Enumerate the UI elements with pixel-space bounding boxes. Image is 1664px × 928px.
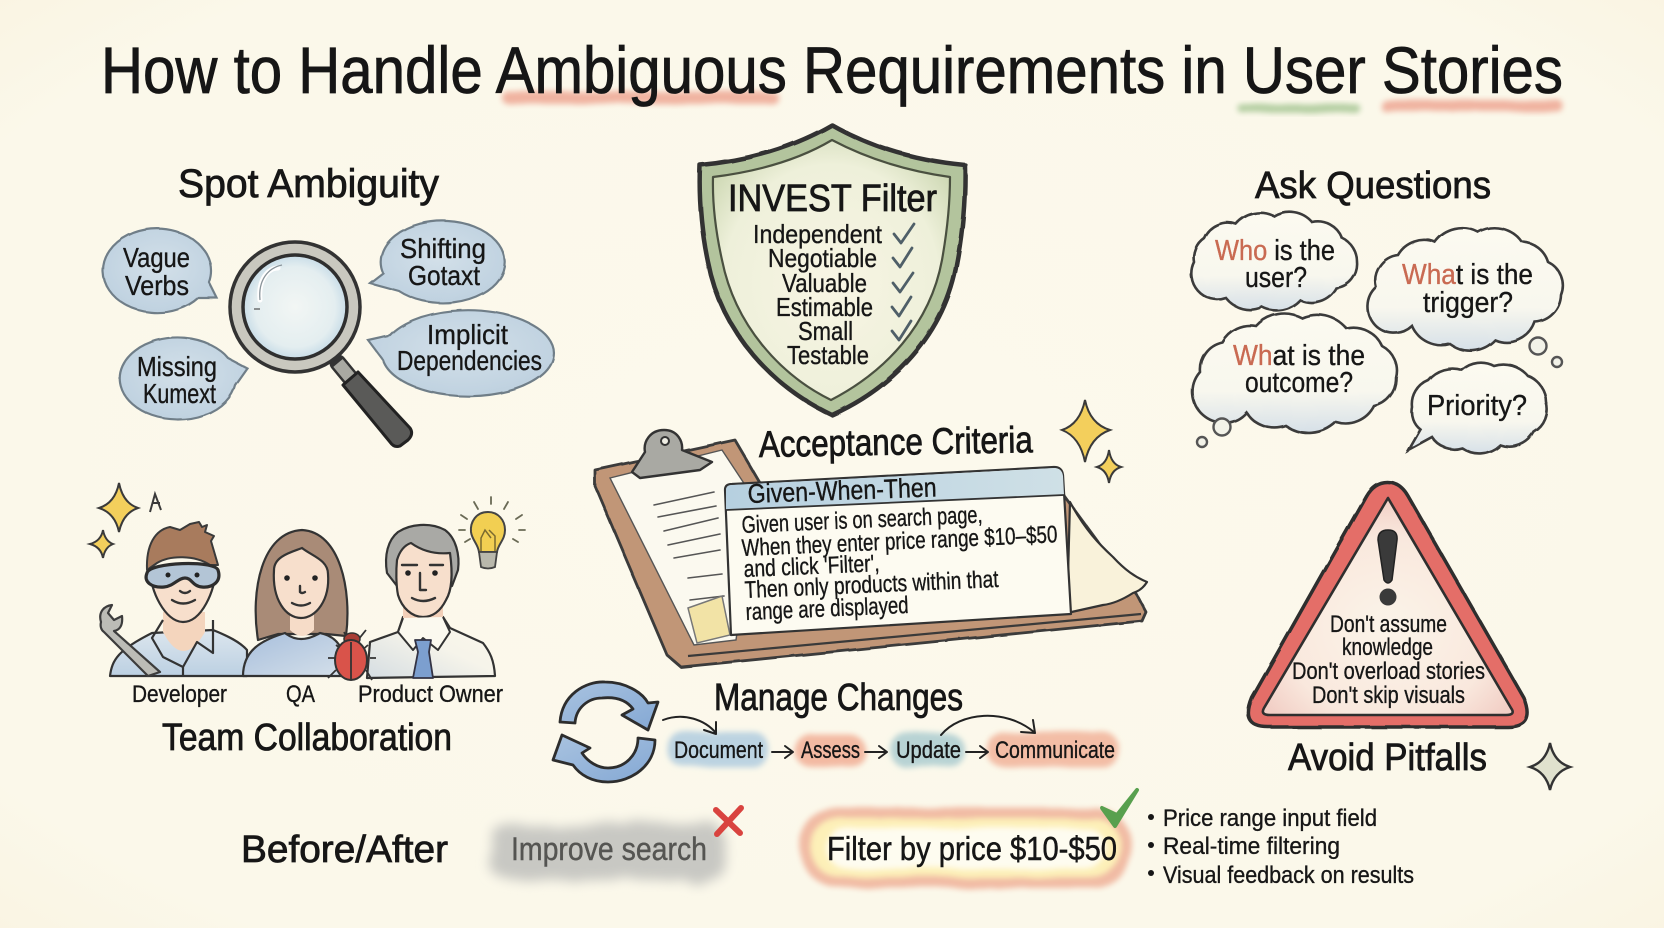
cloud: who is the user xyxy=(1191,212,1357,310)
speech bubble: missing context: Kumext xyxy=(143,378,216,409)
speech bubble: implicit dependencies: Implicit xyxy=(427,319,508,350)
heading: ask questions: Ask Questions xyxy=(1255,165,1491,207)
heading: manage changes: Manage Changes xyxy=(714,677,963,719)
icon: check marks xyxy=(892,224,914,340)
cloud: priority xyxy=(1408,363,1547,453)
sticky note xyxy=(688,596,730,643)
scenario text: When they enter price range $10–$50 xyxy=(741,521,1058,562)
speech bubble: missing context xyxy=(120,337,247,419)
scenario text: Given user is on search page, xyxy=(741,502,983,539)
labels: Developer xyxy=(132,681,227,708)
process flow xyxy=(663,716,1119,767)
bullet list: Visual feedback on results xyxy=(1163,862,1414,889)
person: developer xyxy=(100,522,247,677)
icon: green check xyxy=(1102,790,1137,826)
invest list: Valuable xyxy=(782,268,867,298)
after: filter by price xyxy=(805,813,1127,882)
card: given when then: Given-When-Then xyxy=(747,472,937,509)
clip xyxy=(632,430,712,478)
invest list xyxy=(753,219,883,370)
icon: cycle arrows xyxy=(553,682,658,782)
cloud: what is the trigger: trigger? xyxy=(1423,287,1513,319)
cloud: priority: Priority? xyxy=(1427,390,1527,422)
bullet list xyxy=(1148,805,1414,889)
panel: ask questions xyxy=(1191,165,1563,453)
after: filter by price: Filter by price $10-$50 xyxy=(827,830,1117,867)
invest list: Small xyxy=(798,316,853,346)
icon: bug xyxy=(328,630,376,680)
pitfall list: Don't assume xyxy=(1330,611,1447,638)
icon: wrench xyxy=(100,605,160,676)
cloud: who is the user: Who is the xyxy=(1215,235,1335,267)
step: communicate: Communicate xyxy=(995,737,1115,764)
step: communicate xyxy=(987,732,1119,767)
panel: acceptance criteria xyxy=(595,400,1147,667)
card: given when then xyxy=(725,467,1071,635)
scenario text: and click 'Filter', xyxy=(743,550,880,583)
speech bubble: implicit dependencies xyxy=(368,310,554,396)
invest list: Testable xyxy=(787,340,869,370)
step: document: Document xyxy=(674,737,763,764)
labels xyxy=(132,681,503,708)
speech bubble: vague verbs: Vague xyxy=(123,242,190,273)
speech bubble: shifting gotaxt: Gotaxt xyxy=(408,260,480,291)
heading: spot ambiguity: Spot Ambiguity xyxy=(178,162,439,206)
cloud: who is the user: user? xyxy=(1245,262,1307,294)
cloud: what is the outcome: What is the xyxy=(1233,340,1365,372)
underline: Ambiguous xyxy=(502,91,778,104)
step: update: Update xyxy=(896,737,961,764)
pitfall list: Don't overload stories xyxy=(1292,658,1485,685)
clipboard xyxy=(595,430,1147,667)
panel: avoid pitfalls xyxy=(1248,482,1570,790)
icon: magnifying glass xyxy=(230,242,412,446)
arrows between steps xyxy=(663,716,1035,758)
invest list: Negotiable xyxy=(768,243,877,273)
underline: Stories xyxy=(1381,100,1563,112)
before: improve search: Improve search xyxy=(511,831,707,867)
speech bubble: vague verbs: Verbs xyxy=(125,270,189,301)
scenario text: range are displayed xyxy=(745,592,909,626)
person: qa xyxy=(243,530,348,676)
speech bubble: shifting gotaxt: Shifting xyxy=(400,233,486,264)
labels: Product Owner xyxy=(358,681,503,708)
before: improve search xyxy=(490,824,726,880)
icon: sparkles xyxy=(90,483,161,558)
cloud: what is the outcome: outcome? xyxy=(1245,367,1353,399)
cloud: what is the trigger xyxy=(1367,228,1563,351)
step: assess: Assess xyxy=(801,737,860,764)
speech bubble: missing context: Missing xyxy=(137,351,217,382)
step: document xyxy=(667,732,769,766)
speech bubble: shifting gotaxt xyxy=(370,221,505,303)
panel: before and after xyxy=(241,790,1414,889)
labels: QA xyxy=(286,681,315,708)
bullet list: Price range input field xyxy=(1163,805,1377,832)
cloud: what is the trigger: What is the xyxy=(1402,259,1533,291)
icon: sparkle xyxy=(1530,743,1570,790)
panel: team collaboration xyxy=(90,483,525,759)
heading: acceptance criteria: Acceptance Criteria xyxy=(758,419,1033,465)
scenario text: Then only products within that xyxy=(744,566,999,604)
bullet list: Real-time filtering xyxy=(1163,833,1340,860)
heading: avoid pitfalls: Avoid Pitfalls xyxy=(1288,737,1487,779)
speech bubble: vague verbs xyxy=(103,229,217,313)
heading: team collaboration: Team Collaboration xyxy=(162,717,452,759)
step: update xyxy=(890,734,965,767)
panel: spot ambiguity xyxy=(103,162,554,446)
step: assess xyxy=(795,734,865,767)
underline: User xyxy=(1238,104,1360,113)
scenario text xyxy=(741,502,1058,626)
pitfall list: knowledge xyxy=(1342,634,1433,661)
shield shape xyxy=(700,125,965,415)
heading: invest filter: INVEST Filter xyxy=(728,178,937,220)
pitfall list: Don't skip visuals xyxy=(1312,682,1465,709)
heading: before after: Before/After xyxy=(241,829,448,871)
panel: invest filter shield xyxy=(700,125,965,415)
pitfall list xyxy=(1292,611,1485,709)
panel: manage changes xyxy=(553,677,1119,782)
speech bubble: implicit dependencies: Dependencies xyxy=(397,345,542,376)
notes on sheet xyxy=(654,492,724,612)
invest list: Estimable xyxy=(776,292,873,322)
thought dots xyxy=(1197,338,1562,447)
cloud: what is the outcome xyxy=(1193,314,1397,433)
icon: red cross xyxy=(716,808,741,834)
icon: exclamation mark xyxy=(1378,530,1397,583)
person: product owner xyxy=(367,525,495,678)
icon: lightbulb xyxy=(459,497,525,568)
curled sheet xyxy=(1067,502,1147,613)
warning triangle xyxy=(1248,482,1528,727)
icon: sparkles xyxy=(1062,400,1121,483)
title with underline strokes xyxy=(101,33,1563,113)
invest list: Independent xyxy=(753,219,883,249)
